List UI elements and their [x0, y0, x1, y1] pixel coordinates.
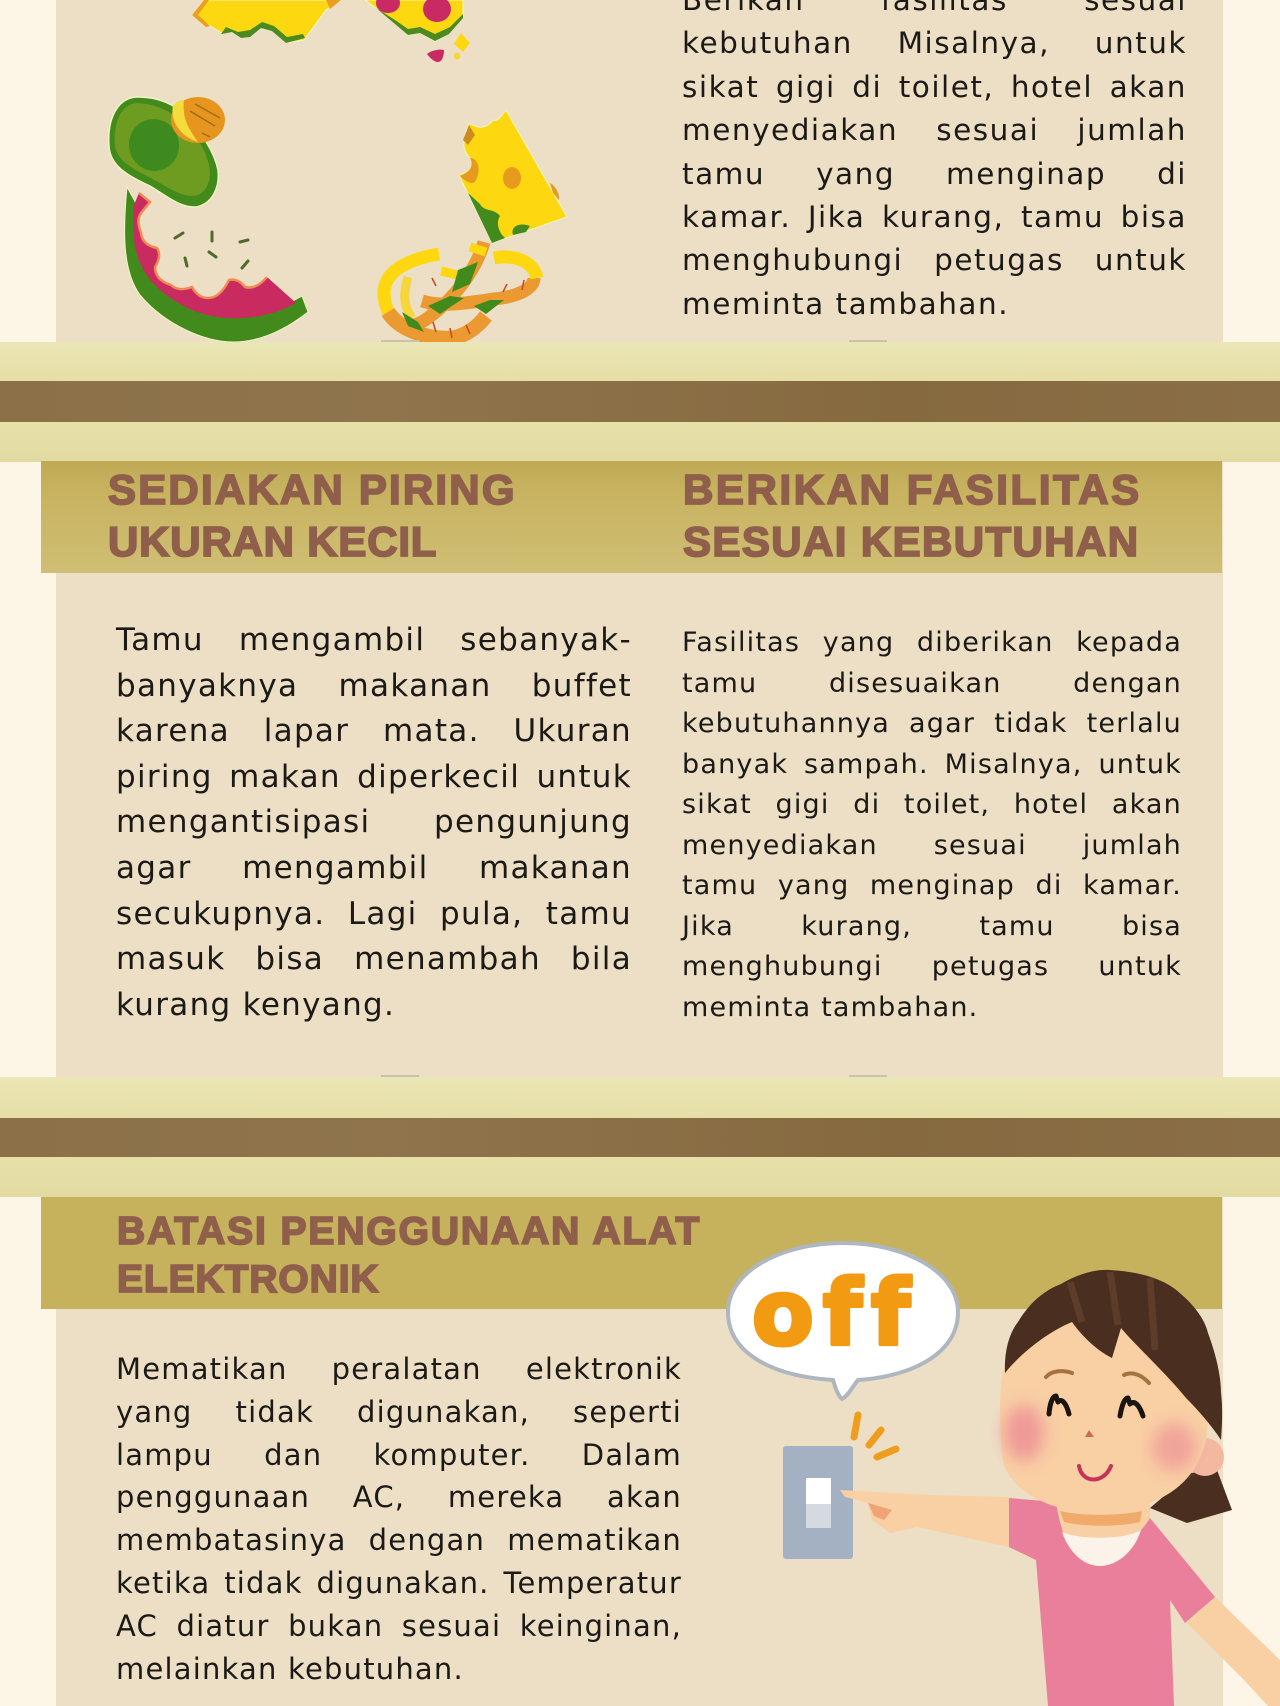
text block: fasilitas: menyediakan sesuai jumlah [682, 113, 1187, 147]
icon: light switch [783, 1415, 896, 1559]
text block: fasilitas: menghubungi petugas untuk [682, 243, 1187, 277]
header bar [41, 461, 1222, 573]
hair back [1150, 1470, 1232, 1523]
divider band 1 [0, 340, 1280, 462]
text block: fasilitas: sikat gigi di toilet, hotel akan [682, 70, 1187, 104]
text block: piring kecil: Tamu mengambil sebanyak- [116, 622, 632, 658]
text block: fasilitas [682, 0, 1187, 321]
choker [1060, 1511, 1142, 1526]
text block: piring kecil: banyaknya makanan buffet [116, 668, 632, 704]
pointing arm [840, 1490, 1009, 1547]
icon: pizza slice right [365, 0, 470, 62]
text block: alat elektronik: penggunaan AC, mereka akan [116, 1480, 682, 1514]
heading: sediakan piring: SEDIAKAN PIRING [108, 466, 517, 513]
section: electronics [41, 1197, 1222, 1686]
icon: avocado [109, 97, 225, 207]
icon: measuring tape peel [384, 242, 537, 338]
face [1000, 1297, 1208, 1512]
hair [1005, 1270, 1222, 1440]
text block: fasilitas sesuai kebutuhan: Fasilitas yang diberikan kepada [682, 627, 1182, 658]
neck [1056, 1495, 1150, 1560]
cheeks [1004, 1405, 1044, 1461]
illustration: recycled food scraps [108, 0, 568, 342]
icon: cheese wedge [459, 110, 567, 243]
speech bubble: off: off [752, 1261, 919, 1366]
text block: piring kecil: secukupnya. Lagi pula, tamu [116, 896, 632, 932]
text block: piring kecil [116, 622, 632, 1023]
text block: alat elektronik: melainkan kebutuhan. [116, 1652, 464, 1686]
text block: fasilitas: kebutuhan Misalnya, untuk [682, 26, 1187, 60]
dress [1009, 1498, 1215, 1706]
text block: piring kecil: karena lapar mata. Ukuran [116, 713, 632, 749]
heading: batasi penggunaan: BATASI PENGGUNAAN ALAT [117, 1210, 701, 1253]
text block: alat elektronik [116, 1352, 682, 1686]
mouth [1079, 1466, 1111, 1480]
text block: fasilitas sesuai kebutuhan: meminta tambahan. [682, 992, 978, 1022]
heading: batasi penggunaan [117, 1210, 701, 1301]
nose [1085, 1430, 1094, 1437]
divider band 2 [0, 1075, 1280, 1197]
icon: pizza slice left [192, 0, 341, 43]
text block: fasilitas sesuai kebutuhan [680, 627, 1182, 1022]
woman figure [840, 1270, 1280, 1706]
text block: alat elektronik: yang tidak digunakan, seperti [116, 1395, 682, 1429]
text block: piring kecil: agar mengambil makanan [116, 850, 632, 886]
illustration: woman switching off the light [726, 1241, 1280, 1706]
text block: alat elektronik: ketika tidak digunakan. Temperatur [116, 1566, 682, 1600]
heading: sediakan piring: UKURAN KECIL [108, 518, 437, 565]
header bar [41, 1197, 1222, 1309]
section: food waste illustration and facilities text [108, 0, 1187, 342]
text block: fasilitas sesuai kebutuhan: kebutuhannya agar tidak terlalu [682, 708, 1182, 739]
heading: batasi penggunaan: ELEKTRONIK [117, 1258, 380, 1301]
text block: piring kecil: masuk bisa menambah bila [116, 941, 632, 977]
heading: sediakan piring [108, 466, 517, 565]
text block: piring kecil: piring makan diperkecil untuk [116, 759, 632, 795]
text block: piring kecil: kurang kenyang. [116, 987, 395, 1023]
collar [1062, 1530, 1141, 1566]
eyebrows [1046, 1371, 1149, 1383]
text block: alat elektronik: AC diatur bukan sesuai keinginan, [116, 1609, 682, 1643]
text block: fasilitas sesuai kebutuhan: menghubungi petugas untuk [682, 951, 1182, 982]
ear [1186, 1438, 1224, 1476]
heading: berikan fasilitas: BERIKAN FASILITAS [683, 466, 1142, 513]
eyes [1049, 1396, 1069, 1414]
speech bubble: off [728, 1243, 958, 1399]
text block: fasilitas: tamu yang menginap di [682, 157, 1187, 191]
text block: fasilitas sesuai kebutuhan: sikat gigi di toilet, hotel akan [682, 789, 1182, 820]
icon: watermelon rind [125, 187, 308, 342]
text block: fasilitas sesuai kebutuhan: tamu disesuaikan dengan [682, 668, 1182, 698]
arm right [1187, 1597, 1280, 1706]
text block: fasilitas sesuai kebutuhan: Jika kurang, tamu bisa [682, 910, 1182, 942]
text block: fasilitas: kamar. Jika kurang, tamu bisa [682, 200, 1187, 234]
text block: fasilitas: meminta tambahan. [682, 287, 1009, 321]
text block: piring kecil: mengantisipasi pengunjung [116, 804, 632, 840]
heading: berikan fasilitas [683, 466, 1142, 565]
text block: alat elektronik: membatasinya dengan mematikan [116, 1523, 682, 1557]
heading: berikan fasilitas: SESUAI KEBUTUHAN [683, 518, 1139, 565]
text block: alat elektronik: Mematikan peralatan elektronik [116, 1352, 682, 1386]
text block: fasilitas sesuai kebutuhan: menyediakan sesuai jumlah [682, 830, 1182, 860]
section: tips row [41, 461, 1222, 1023]
text block: fasilitas sesuai kebutuhan: tamu yang menginap di kamar. [682, 870, 1182, 901]
text block: fasilitas sesuai kebutuhan: banyak sampah. Misalnya, untuk [682, 748, 1182, 780]
text block: alat elektronik: lampu dan komputer. Dalam [116, 1438, 682, 1472]
